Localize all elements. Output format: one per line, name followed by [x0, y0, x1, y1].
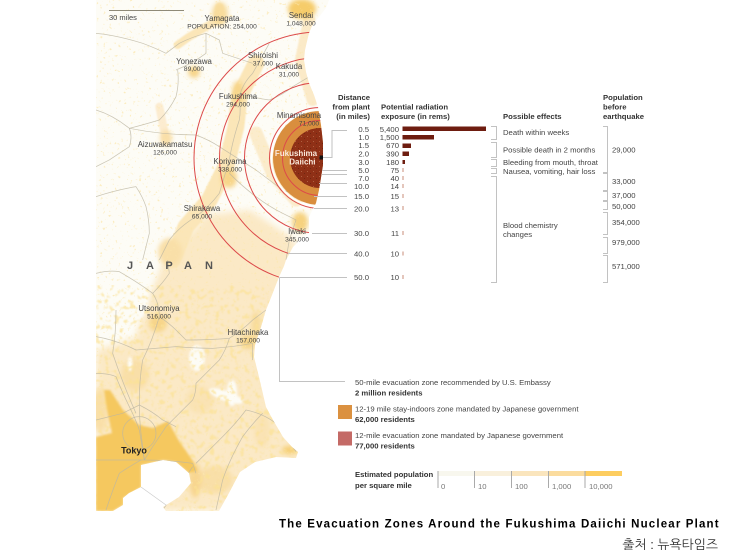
- 12-mile evacuation zone: [290, 128, 323, 188]
- scale bar: [109, 10, 184, 22]
- city labels: POPULATION: 254,000: [187, 24, 257, 30]
- Tokyo metropolitan area: [96, 390, 197, 511]
- legend: evacuation zone: [338, 431, 564, 450]
- radiation exposure values: 40: [390, 174, 399, 183]
- road network: [96, 33, 309, 510]
- legend: 50-mile zone: 50-mile evacuation zone recommended by U.S. Embassy: [355, 378, 551, 387]
- city labels: Shiroishi: [248, 51, 278, 60]
- legend: population density scale: 10: [478, 482, 487, 491]
- column headers: Possible effects: [503, 112, 562, 121]
- city labels: 71,000: [299, 120, 319, 128]
- 12-19 mile stay-indoors zone: [273, 111, 323, 205]
- plant label: [275, 149, 318, 166]
- country label: A: [184, 260, 192, 272]
- legend: stay-indoors zone: 62,000 residents: [355, 415, 415, 424]
- possible effects text: Possible death in 2 months: [503, 146, 595, 154]
- population values: 50,000: [612, 202, 636, 211]
- title: The Evacuation Zones Around the Fukushima Daiichi Nuclear Plant: [279, 518, 720, 530]
- city labels: Shirakawa: [184, 204, 221, 213]
- radiation bar chart: [402, 126, 486, 279]
- bay crossing line: [141, 487, 166, 505]
- possible effects text: Nausea, vomiting, hair loss: [503, 167, 595, 176]
- city labels: 294,000: [226, 102, 250, 108]
- legend: population density scale: per square mile: [355, 481, 413, 490]
- city labels: Yamagata: [205, 14, 240, 23]
- leader lines from distance rows to map: [280, 130, 347, 382]
- city labels: Fukushima: [219, 92, 258, 101]
- legend: population density scale: 1,000: [552, 482, 571, 491]
- city labels: 1,048,000: [286, 20, 316, 28]
- column headers: before: [603, 102, 627, 112]
- legend: population density scale: 0: [441, 482, 445, 491]
- distance column: 10.0: [354, 182, 369, 191]
- distance column: 5.0: [358, 166, 369, 175]
- column headers: Population: [603, 93, 643, 102]
- column headers: (in miles): [336, 112, 370, 121]
- possible effects text: [503, 128, 599, 239]
- radiation exposure values: 180: [386, 158, 399, 167]
- city labels: 157,000: [236, 338, 260, 344]
- possible effects brackets: [491, 126, 496, 282]
- column headers: Distance: [338, 93, 371, 102]
- plant label: Fukushima: [275, 149, 318, 158]
- legend: population density scale: [355, 470, 622, 491]
- distance column: 1.5: [358, 141, 369, 150]
- column headers: exposure (in rems): [381, 112, 450, 121]
- city labels: 126,000: [153, 150, 177, 156]
- city labels: Aizuwakamatsu: [138, 140, 192, 149]
- city labels: Yonezawa: [176, 57, 213, 66]
- radiation exposure values: 1,500: [380, 133, 399, 142]
- distance column: 7.0: [358, 174, 369, 183]
- radiation exposure values: 11: [391, 229, 399, 238]
- city labels: 516,000: [147, 314, 171, 320]
- speckle of villages: [96, 0, 336, 511]
- city labels: Minamisoma: [277, 111, 322, 120]
- country label: [127, 260, 213, 272]
- legend: population density scale: Estimated population: [355, 470, 433, 479]
- city labels: 31,000: [279, 72, 299, 78]
- distance column: 0.5: [358, 125, 369, 134]
- country label: J: [127, 260, 133, 272]
- unpopulated patches: [126, 299, 244, 406]
- distance column: 3.0: [358, 158, 369, 167]
- population values: 979,000: [612, 238, 640, 247]
- legend: 50-mile zone: 2 million residents: [355, 388, 422, 398]
- population values: 29,000: [612, 146, 636, 154]
- city labels: 338,000: [218, 166, 242, 174]
- population values: 571,000: [612, 262, 640, 271]
- radiation exposure values: 10: [390, 250, 399, 258]
- map of eastern Japan: [96, 0, 328, 511]
- population values: 354,000: [612, 218, 640, 227]
- possible effects text: changes: [503, 230, 532, 239]
- plant label: Daiichi: [289, 158, 316, 166]
- column headers: [332, 93, 645, 121]
- distance column: 50.0: [354, 273, 369, 282]
- distance column: 1.0: [358, 133, 369, 142]
- population density shading: [92, 0, 336, 511]
- population values: 33,000: [612, 177, 636, 186]
- radiation exposure values: [380, 125, 400, 282]
- radiation exposure values: 13: [390, 204, 399, 214]
- city labels: 89,000: [184, 66, 204, 73]
- city labels: Tokyo: [121, 446, 147, 456]
- distance column: [354, 125, 369, 282]
- possible effects text: Blood chemistry: [503, 221, 558, 230]
- city labels: Kakuda: [276, 62, 303, 71]
- legend: stay-indoors zone: 12-19 mile stay-indoors zone mandated by Japanese government: [355, 404, 579, 414]
- column headers: from plant: [332, 102, 370, 112]
- country label: N: [205, 260, 213, 272]
- radiation exposure values: 75: [390, 166, 399, 175]
- legend: 50-mile zone: [355, 378, 551, 398]
- column headers: earthquake: [603, 112, 645, 121]
- population values: [612, 146, 640, 271]
- possible effects text: Bleeding from mouth, throat: [503, 158, 599, 167]
- distance column: 2.0: [358, 150, 369, 158]
- city labels: 37,000: [253, 60, 273, 68]
- column headers: Potential radiation: [381, 102, 448, 112]
- city labels: Hitachinaka: [228, 328, 269, 337]
- city labels: Utsonomiya: [138, 304, 180, 313]
- population values: 37,000: [612, 191, 636, 200]
- legend: population density scale: 100: [515, 482, 528, 491]
- legend: evacuation zone: 12-mile evacuation zone mandated by Japanese government: [355, 431, 564, 440]
- legend: population density scale: 10,000: [589, 482, 613, 491]
- city labels: Iwaki: [288, 227, 306, 236]
- radiation exposure values: 15: [390, 192, 399, 201]
- plant marker: [320, 156, 323, 160]
- country label: A: [146, 260, 154, 272]
- distance column: 30.0: [354, 229, 369, 238]
- legend: evacuation zone: 77,000 residents: [355, 442, 415, 450]
- evacuation distance rings: [194, 32, 320, 278]
- land base: [96, 0, 328, 346]
- radiation exposure values: 390: [386, 150, 399, 158]
- scale bar: 30 miles: [109, 13, 137, 22]
- city labels: [121, 11, 322, 456]
- distance column: 40.0: [354, 250, 369, 258]
- denser speckle in the south: [96, 285, 306, 511]
- city labels: Koriyama: [214, 157, 247, 166]
- city labels: 65,000: [192, 214, 212, 220]
- city labels: Sendai: [289, 11, 313, 20]
- possible effects text: Death within weeks: [503, 128, 569, 137]
- city labels: 345,000: [285, 236, 309, 244]
- distance column: 20.0: [354, 204, 369, 214]
- radiation exposure values: 670: [386, 141, 399, 150]
- radiation exposure values: 14: [390, 182, 400, 191]
- legend: stay-indoors zone: [338, 404, 579, 424]
- radiation exposure values: 5,400: [380, 125, 399, 134]
- speckle in evacuation zone: [292, 128, 323, 187]
- population brackets: [603, 126, 608, 282]
- distance column: 15.0: [354, 192, 369, 201]
- radiation exposure values: 10: [390, 273, 399, 282]
- country label: P: [165, 260, 173, 272]
